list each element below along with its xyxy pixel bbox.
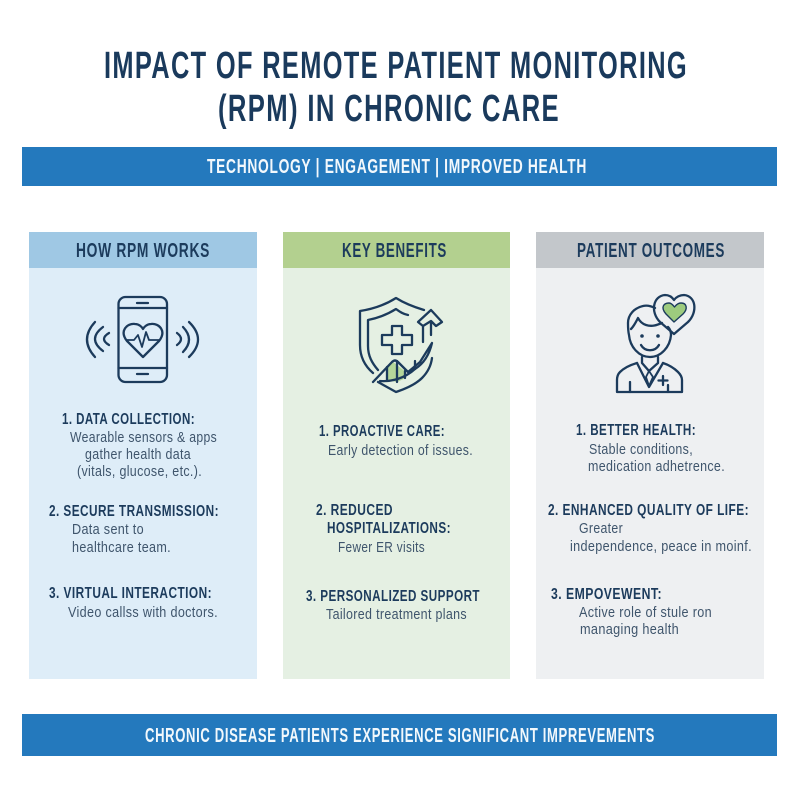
panel: patient outcomes xyxy=(536,232,764,679)
list item: empowerment: Active role of stule ron xyxy=(579,604,712,621)
heading: patient outcomes xyxy=(536,232,764,268)
list item: data collection xyxy=(62,411,217,480)
list item: personalized support xyxy=(306,588,480,623)
list item: secure transmission: 2. SECURE TRANSMISSION: xyxy=(49,503,219,520)
list item: virtual interaction: Video callss with doctors. xyxy=(68,604,218,621)
heading: how RPM works xyxy=(29,232,257,268)
list item: better health: medication adhetrence. xyxy=(588,458,725,475)
list item: secure transmission: Data sent to xyxy=(72,521,144,538)
list item: enhanced quality of life: Greater xyxy=(579,520,623,537)
list item: enhanced quality of life xyxy=(548,502,752,555)
list item: personalized support: 3. PERSONALIZED SUPPORT xyxy=(306,588,480,605)
list item: virtual interaction xyxy=(49,585,218,621)
panel: key benefits xyxy=(283,232,510,679)
list item: reduced hospitalizations: HOSPITALIZATIONS: xyxy=(327,520,451,537)
list item: secure transmission: healthcare team. xyxy=(72,539,171,556)
list item: empowerment xyxy=(551,586,712,638)
list item: enhanced quality of life: independence, peace in moinf. xyxy=(570,538,752,555)
list item: data collection: (vitals, glucose, etc.). xyxy=(77,463,202,480)
list item: personalized support: Tailored treatment plans xyxy=(326,606,467,623)
list item: data collection: 1. DATA COLLECTION: xyxy=(62,411,195,428)
list item: reduced hospitalizations: 2. REDUCED xyxy=(316,502,393,519)
list item: empowerment: 3. EMPOVEWENT: xyxy=(551,586,662,603)
title: (RPM) IN CHRONIC CARE xyxy=(218,88,560,130)
list item: better health: 1. BETTER HEALTH: xyxy=(576,422,696,439)
title xyxy=(104,45,688,130)
panel: how RPM works xyxy=(29,232,257,679)
list item: proactive care: 1. PROACTIVE CARE: xyxy=(319,423,445,440)
heading: key benefits xyxy=(283,232,510,268)
list item: reduced hospitalizations xyxy=(316,502,451,556)
heading: patient outcomes: PATIENT OUTCOMES xyxy=(577,240,725,262)
list item: proactive care xyxy=(319,423,473,459)
bottom banner xyxy=(22,714,777,756)
list item: data collection: Wearable sensors & apps xyxy=(70,429,217,446)
list item: secure transmission xyxy=(49,503,219,556)
icon: smartphone with heart and signal waves xyxy=(87,297,198,382)
top banner: TECHNOLOGY | ENGAGEMENT | IMPROVED HEALTH xyxy=(207,156,587,178)
list item: virtual interaction: 3. VIRTUAL INTERACTION: xyxy=(49,585,212,602)
list item: reduced hospitalizations: Fewer ER visits xyxy=(338,539,425,556)
list item: data collection: gather health data xyxy=(85,446,191,463)
top banner xyxy=(22,147,777,186)
list item: better health xyxy=(576,422,725,475)
icon: shield with medical cross and rising chart xyxy=(360,298,442,392)
heading: key benefits: KEY BENEFITS xyxy=(342,240,447,262)
heading: how RPM works: HOW RPM WORKS xyxy=(76,240,210,262)
list item: better health: Stable conditions, xyxy=(589,441,693,458)
list item: empowerment: managing health xyxy=(580,621,679,638)
icon: smiling person with heart bubble xyxy=(617,295,694,392)
list item: proactive care: Early detection of issues. xyxy=(328,442,473,459)
